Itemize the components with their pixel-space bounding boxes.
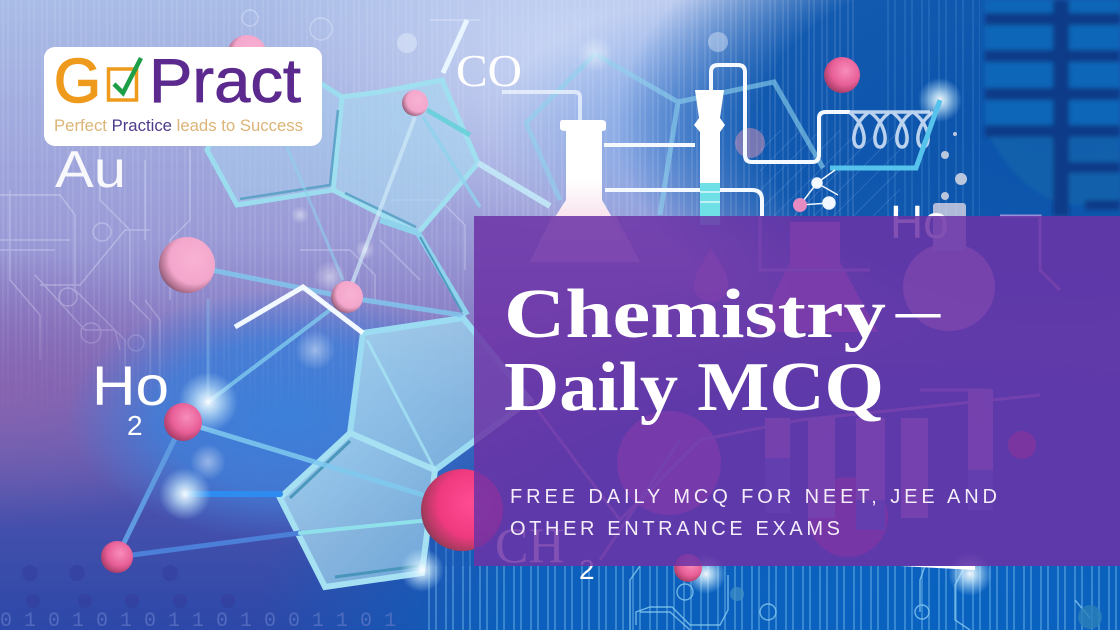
logo checkbox <box>108 58 141 100</box>
logo letter G: G <box>54 47 101 116</box>
glow points <box>159 32 992 596</box>
pink spheres <box>101 35 967 582</box>
lab apparatus: coil <box>849 112 933 147</box>
molecule: white bond <box>235 287 363 333</box>
small molecule icon <box>793 170 838 212</box>
faded lab glassware behind panel <box>530 203 1060 560</box>
chemical label: Ho2 <box>92 354 169 441</box>
logo <box>44 47 322 146</box>
lab apparatus: cyan tube <box>830 100 940 168</box>
molecule: glass pentagons <box>280 318 530 587</box>
chemical label: Ho2: 2 <box>127 410 143 441</box>
title <box>504 271 941 426</box>
lab apparatus: pipes <box>502 65 850 216</box>
panel: purple title overlay <box>474 216 1120 566</box>
background: binary digits <box>0 565 396 630</box>
chemical label: Au: Au <box>55 141 126 199</box>
molecule: thin bonds <box>117 265 460 557</box>
subtitle <box>510 486 997 540</box>
title: Chemistry <box>504 276 886 353</box>
chemical label: CO: CO <box>456 45 522 96</box>
chemical label: Ho2: Ho <box>92 354 169 417</box>
title: – <box>895 271 941 348</box>
chemical label: CH2 <box>495 517 595 585</box>
logo tagline: Perfect Practice leads to Success <box>54 117 303 135</box>
lab apparatus: flask <box>540 120 625 240</box>
title: Daily MCQ <box>504 349 884 426</box>
logo wordmark: Pract <box>149 47 301 116</box>
lab apparatus: column <box>694 90 725 225</box>
molecule: upper glass ring <box>207 70 478 233</box>
chemical label: CH2: 2 <box>579 554 595 585</box>
molecule: faint bonds in upper area <box>287 20 823 315</box>
subtitle: OTHER ENTRANCE EXAMS <box>510 518 840 540</box>
chemical label: CH2: CH <box>495 517 564 573</box>
subtitle: FREE DAILY MCQ FOR NEET, JEE AND <box>510 486 997 508</box>
background: dark grid top right <box>985 0 1120 216</box>
chemical label: Ho upper right: Ho <box>890 196 949 248</box>
